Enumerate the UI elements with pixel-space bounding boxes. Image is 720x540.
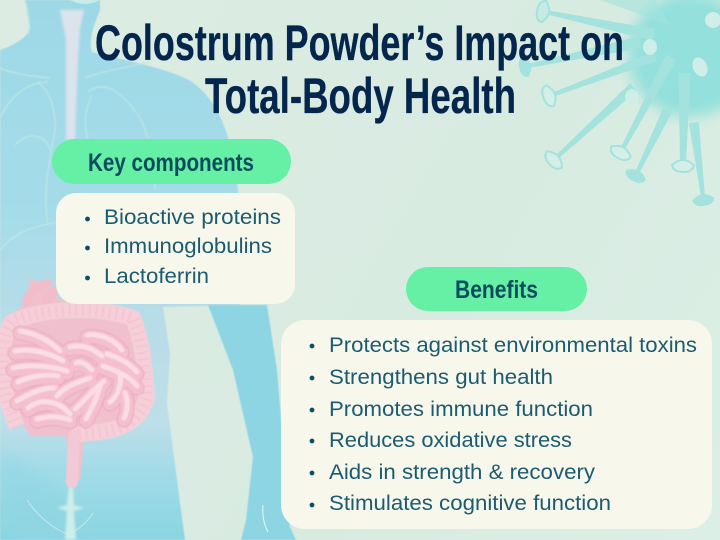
- small intestine loops: [13, 331, 137, 422]
- panel: benefits list: Stimulates cognitive function: [329, 492, 611, 515]
- rectum: [72, 436, 74, 482]
- heading pill: key components: Key components: [88, 149, 254, 177]
- panel: benefits list: Promotes immune function: [329, 398, 593, 421]
- colon: [3, 310, 147, 436]
- title: Total-Body Health: [205, 68, 516, 124]
- pelvic lines: [27, 500, 93, 534]
- title: [95, 15, 624, 124]
- panel: key components list: Lactoferrin: [104, 265, 209, 288]
- panel: benefits list: Protects against environmental toxins: [329, 334, 697, 357]
- stomach: [26, 283, 56, 304]
- lung outlines: [0, 0, 155, 250]
- arm: [208, 305, 296, 540]
- panel: key components list: Bioactive proteins: [104, 206, 281, 229]
- intestines: [0, 278, 150, 482]
- heading pill: benefits: Benefits: [455, 276, 538, 304]
- panel: benefits list: [281, 320, 712, 529]
- panel: key components list: [56, 193, 295, 304]
- panel: benefits list: Aids in strength & recovery: [329, 461, 596, 484]
- heading pill: key components: [52, 139, 291, 184]
- heading pill: benefits: [406, 267, 587, 311]
- human body silhouette: [0, 0, 296, 540]
- panel: benefits list: Reduces oxidative stress: [329, 429, 572, 452]
- trachea: [60, 10, 84, 140]
- panel: benefits list: Strengthens gut health: [329, 366, 553, 389]
- virus illustration: [517, 0, 720, 207]
- panel: key components list: Immunoglobulins: [104, 235, 272, 258]
